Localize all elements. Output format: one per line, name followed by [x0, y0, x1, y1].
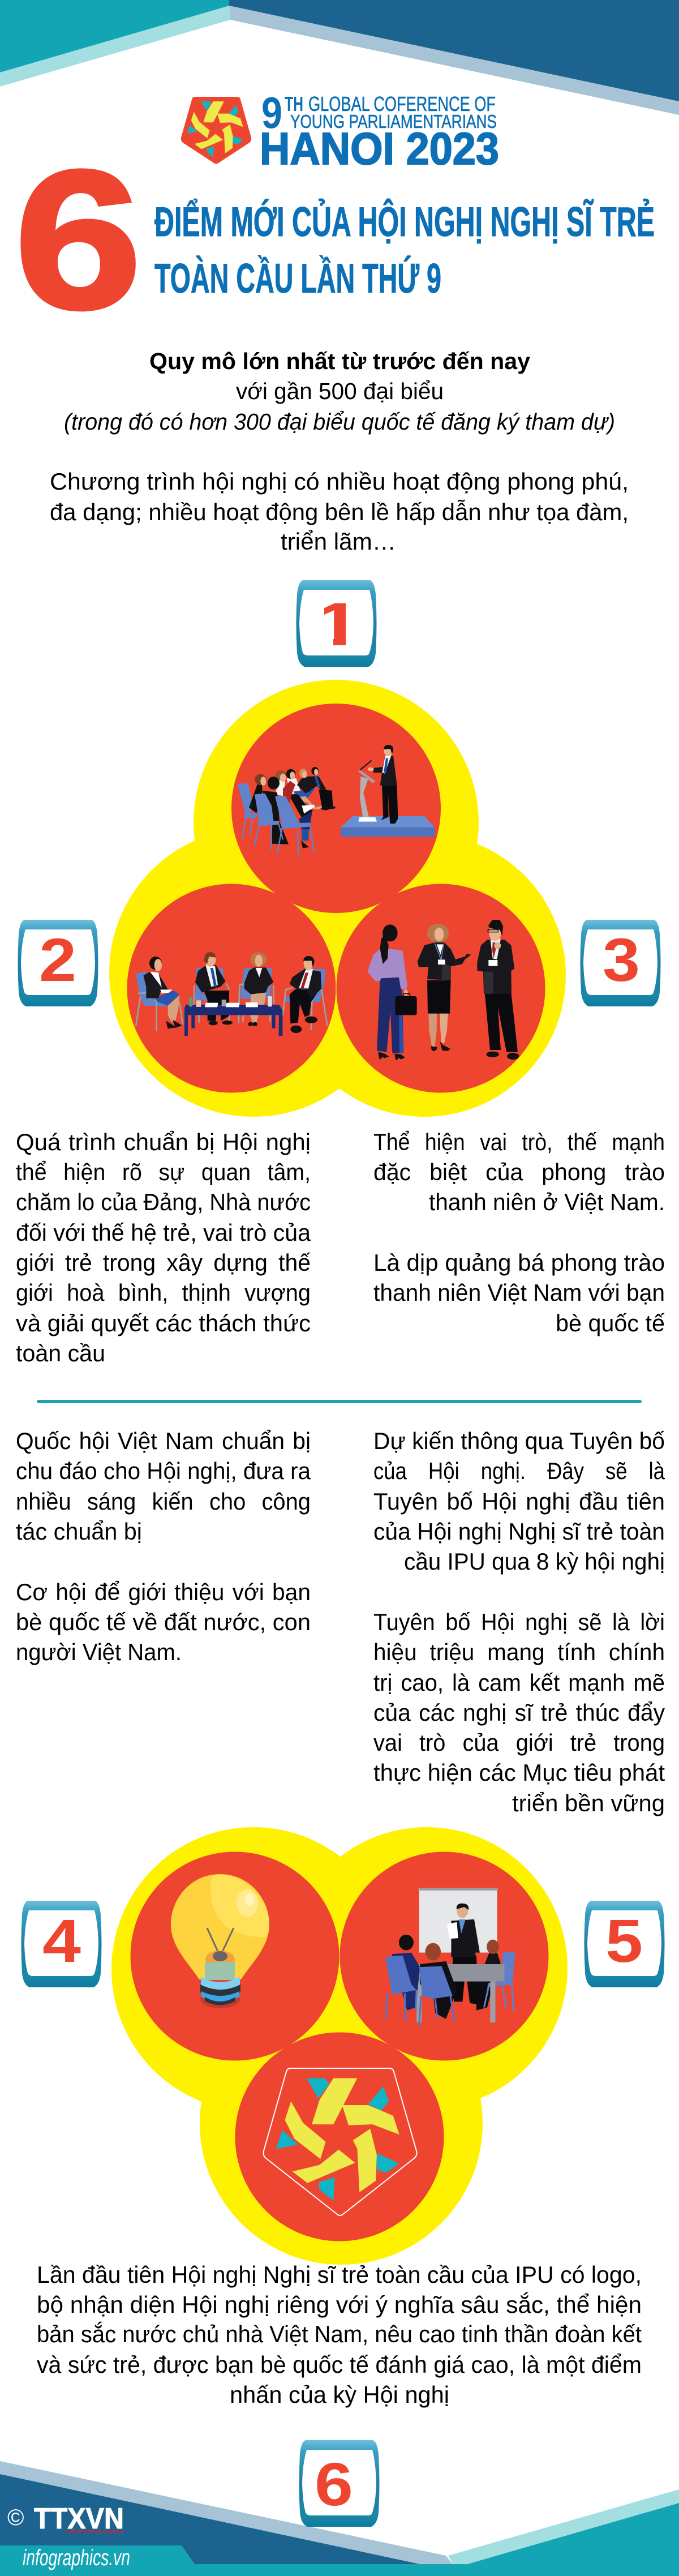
badge 6 — [299, 2440, 379, 2527]
title — [154, 199, 655, 302]
title: TOÀN CẦU LẦN THỨ 9 — [154, 256, 441, 302]
scale summary: Quy mô lớn nhất từ trước đến nay — [149, 348, 530, 374]
big number 6: 6 — [14, 129, 142, 350]
text: point 2 part one: thể hiện rõ sự quan tâm, — [16, 1159, 311, 1185]
agency credit: © — [7, 2505, 24, 2530]
text: point 3 part two: triển bền vững — [512, 1790, 665, 1816]
badge 5: 5 — [605, 1906, 643, 1975]
badge 4 — [22, 1901, 102, 1987]
icon: conference logo on red circle — [264, 2068, 416, 2215]
badge 5 — [584, 1901, 664, 1987]
text: point 2 part one: đối với thế hệ trẻ, vai trò của — [16, 1219, 311, 1246]
conference name: 9 — [261, 88, 282, 138]
text: point 3 part two: vai trò của giới trẻ trong — [373, 1729, 665, 1756]
header banner — [0, 0, 679, 115]
badge 1 — [296, 580, 377, 667]
text: point 3 part two — [373, 1428, 665, 1816]
text: point 3 part two: thực hiện các Mục tiêu phát — [373, 1759, 665, 1786]
scale summary: (trong đó có hơn 300 đại biểu quốc tế đăng ký tham dự) — [64, 409, 615, 435]
badge 1: 1 — [314, 590, 362, 658]
text: point 3 part two: Tuyên bố Hội nghị đầu tiên — [373, 1488, 665, 1515]
text: point 3 part two: của Hội nghị Nghị sĩ trẻ toàn — [373, 1518, 665, 1545]
text: point 3 part one: thanh niên Việt Nam với bạn — [373, 1279, 665, 1306]
text: point 6: và sức trẻ, được bạn bè quốc tế đánh giá cao, là một điểm — [37, 2351, 642, 2378]
text: point 3 part one: thanh niên ở Việt Nam. — [429, 1189, 665, 1215]
text: point 6: bộ nhận diện Hội nghị riêng với ý nghĩa sâu sắc, thể hiện — [37, 2291, 642, 2318]
text: point 3 part two: của các nghị sĩ trẻ thúc đẩy — [373, 1699, 665, 1726]
programme paragraph: triển lãm… — [281, 528, 396, 555]
text: point 2 part two: tác chuẩn bị — [16, 1518, 142, 1545]
text: point 2 part two: người Việt Nam. — [16, 1639, 182, 1665]
upper circles background — [109, 680, 566, 1117]
text: point 2 part one — [16, 1129, 311, 1366]
text: point 3 part two: trị cao, là cam kết mạnh mẽ — [373, 1669, 665, 1696]
badge 2: 2 — [39, 925, 76, 994]
text: point 6: nhấn của kỳ Hội nghị — [230, 2381, 449, 2408]
badge 4: 4 — [42, 1906, 81, 1975]
text: point 3 part one — [373, 1129, 665, 1336]
illustration: meeting room presentation — [385, 1888, 515, 2026]
text: point 2 part two: bè quốc tế về đất nước, con — [16, 1609, 311, 1635]
text: point 3 part one: bè quốc tế — [556, 1310, 665, 1336]
text: point 2 part one: và giải quyết các thách thức — [16, 1310, 311, 1336]
text: point 2 part two — [16, 1428, 311, 1665]
text: point 2 part one: giới hoà bình, thịnh vượng — [16, 1279, 311, 1306]
badge 3: 3 — [603, 925, 640, 994]
website: infographics.vn — [23, 2545, 130, 2570]
text: point 3 part one: Là dịp quảng bá phong trào — [373, 1249, 665, 1276]
conference name — [260, 88, 499, 174]
conference name: YOUNG PARLIAMENTARIANS — [290, 111, 497, 132]
illustration: panel discussion — [136, 952, 327, 1036]
red circles — [130, 1852, 549, 2241]
text: point 2 part two: chu đáo cho Hội nghị, đưa ra — [16, 1458, 311, 1484]
text: point 3 part two: hiệu triệu mang tính chính — [373, 1639, 665, 1665]
text: point 2 part two: nhiều sáng kiến cho công — [16, 1488, 311, 1515]
text: point 2 part two: Cơ hội để giới thiệu với bạn — [16, 1579, 311, 1605]
lower circles background — [111, 1827, 568, 2265]
conference logo — [181, 97, 251, 164]
badge 3 — [581, 920, 661, 1006]
text: point 6 — [37, 2261, 642, 2408]
badge 6: 6 — [315, 2450, 353, 2518]
text: point 3 part two: Tuyên bố Hội nghị sẽ là lời — [373, 1609, 665, 1635]
text: point 2 part one: Quá trình chuẩn bị Hội nghị — [16, 1129, 311, 1155]
text: point 6: Lần đầu tiên Hội nghị Nghị sĩ trẻ toàn cầu của IPU có logo, — [37, 2261, 642, 2288]
footer banner — [0, 2461, 679, 2576]
illustration: speaker and audience — [238, 745, 435, 856]
scale summary: với gần 500 đại biểu — [236, 378, 444, 404]
text: point 2 part two: Quốc hội Việt Nam chuẩn bị — [16, 1428, 311, 1454]
agency credit: Vietnam News Agency — [66, 2528, 123, 2534]
agency credit: TTXVN — [34, 2502, 124, 2535]
icon: light bulb — [171, 1874, 269, 2008]
illustration: three standing delegates — [367, 920, 519, 1060]
text: point 3 part two: cầu IPU qua 8 kỳ hội nghị — [404, 1548, 665, 1575]
badge 2 — [18, 920, 98, 1006]
red circles — [127, 704, 545, 1092]
conference name: TH — [285, 92, 303, 115]
text: point 2 part one: giới trẻ trong xây dựng thế — [16, 1249, 311, 1276]
scale summary — [64, 348, 615, 435]
text: point 3 part one: đặc biệt của phong trào — [373, 1159, 665, 1185]
conference name: GLOBAL COFERENCE OF — [308, 92, 496, 115]
programme paragraph: đa dạng; nhiều hoạt động bên lề hấp dẫn như tọa đàm, — [50, 499, 629, 525]
text: point 2 part one: chăm lo của Đảng, Nhà nước — [16, 1189, 311, 1215]
text: point 2 part one: toàn cầu — [16, 1340, 105, 1366]
conference name: HANOI 2023 — [260, 123, 499, 174]
text: point 3 part two: Dự kiến thông qua Tuyên bố — [373, 1428, 665, 1454]
programme paragraph: Chương trình hội nghị có nhiều hoạt động phong phú, — [50, 468, 629, 495]
text: point 6: bản sắc nước chủ nhà Việt Nam, nêu cao tinh thần đoàn kết — [37, 2321, 642, 2347]
programme paragraph — [50, 468, 629, 555]
